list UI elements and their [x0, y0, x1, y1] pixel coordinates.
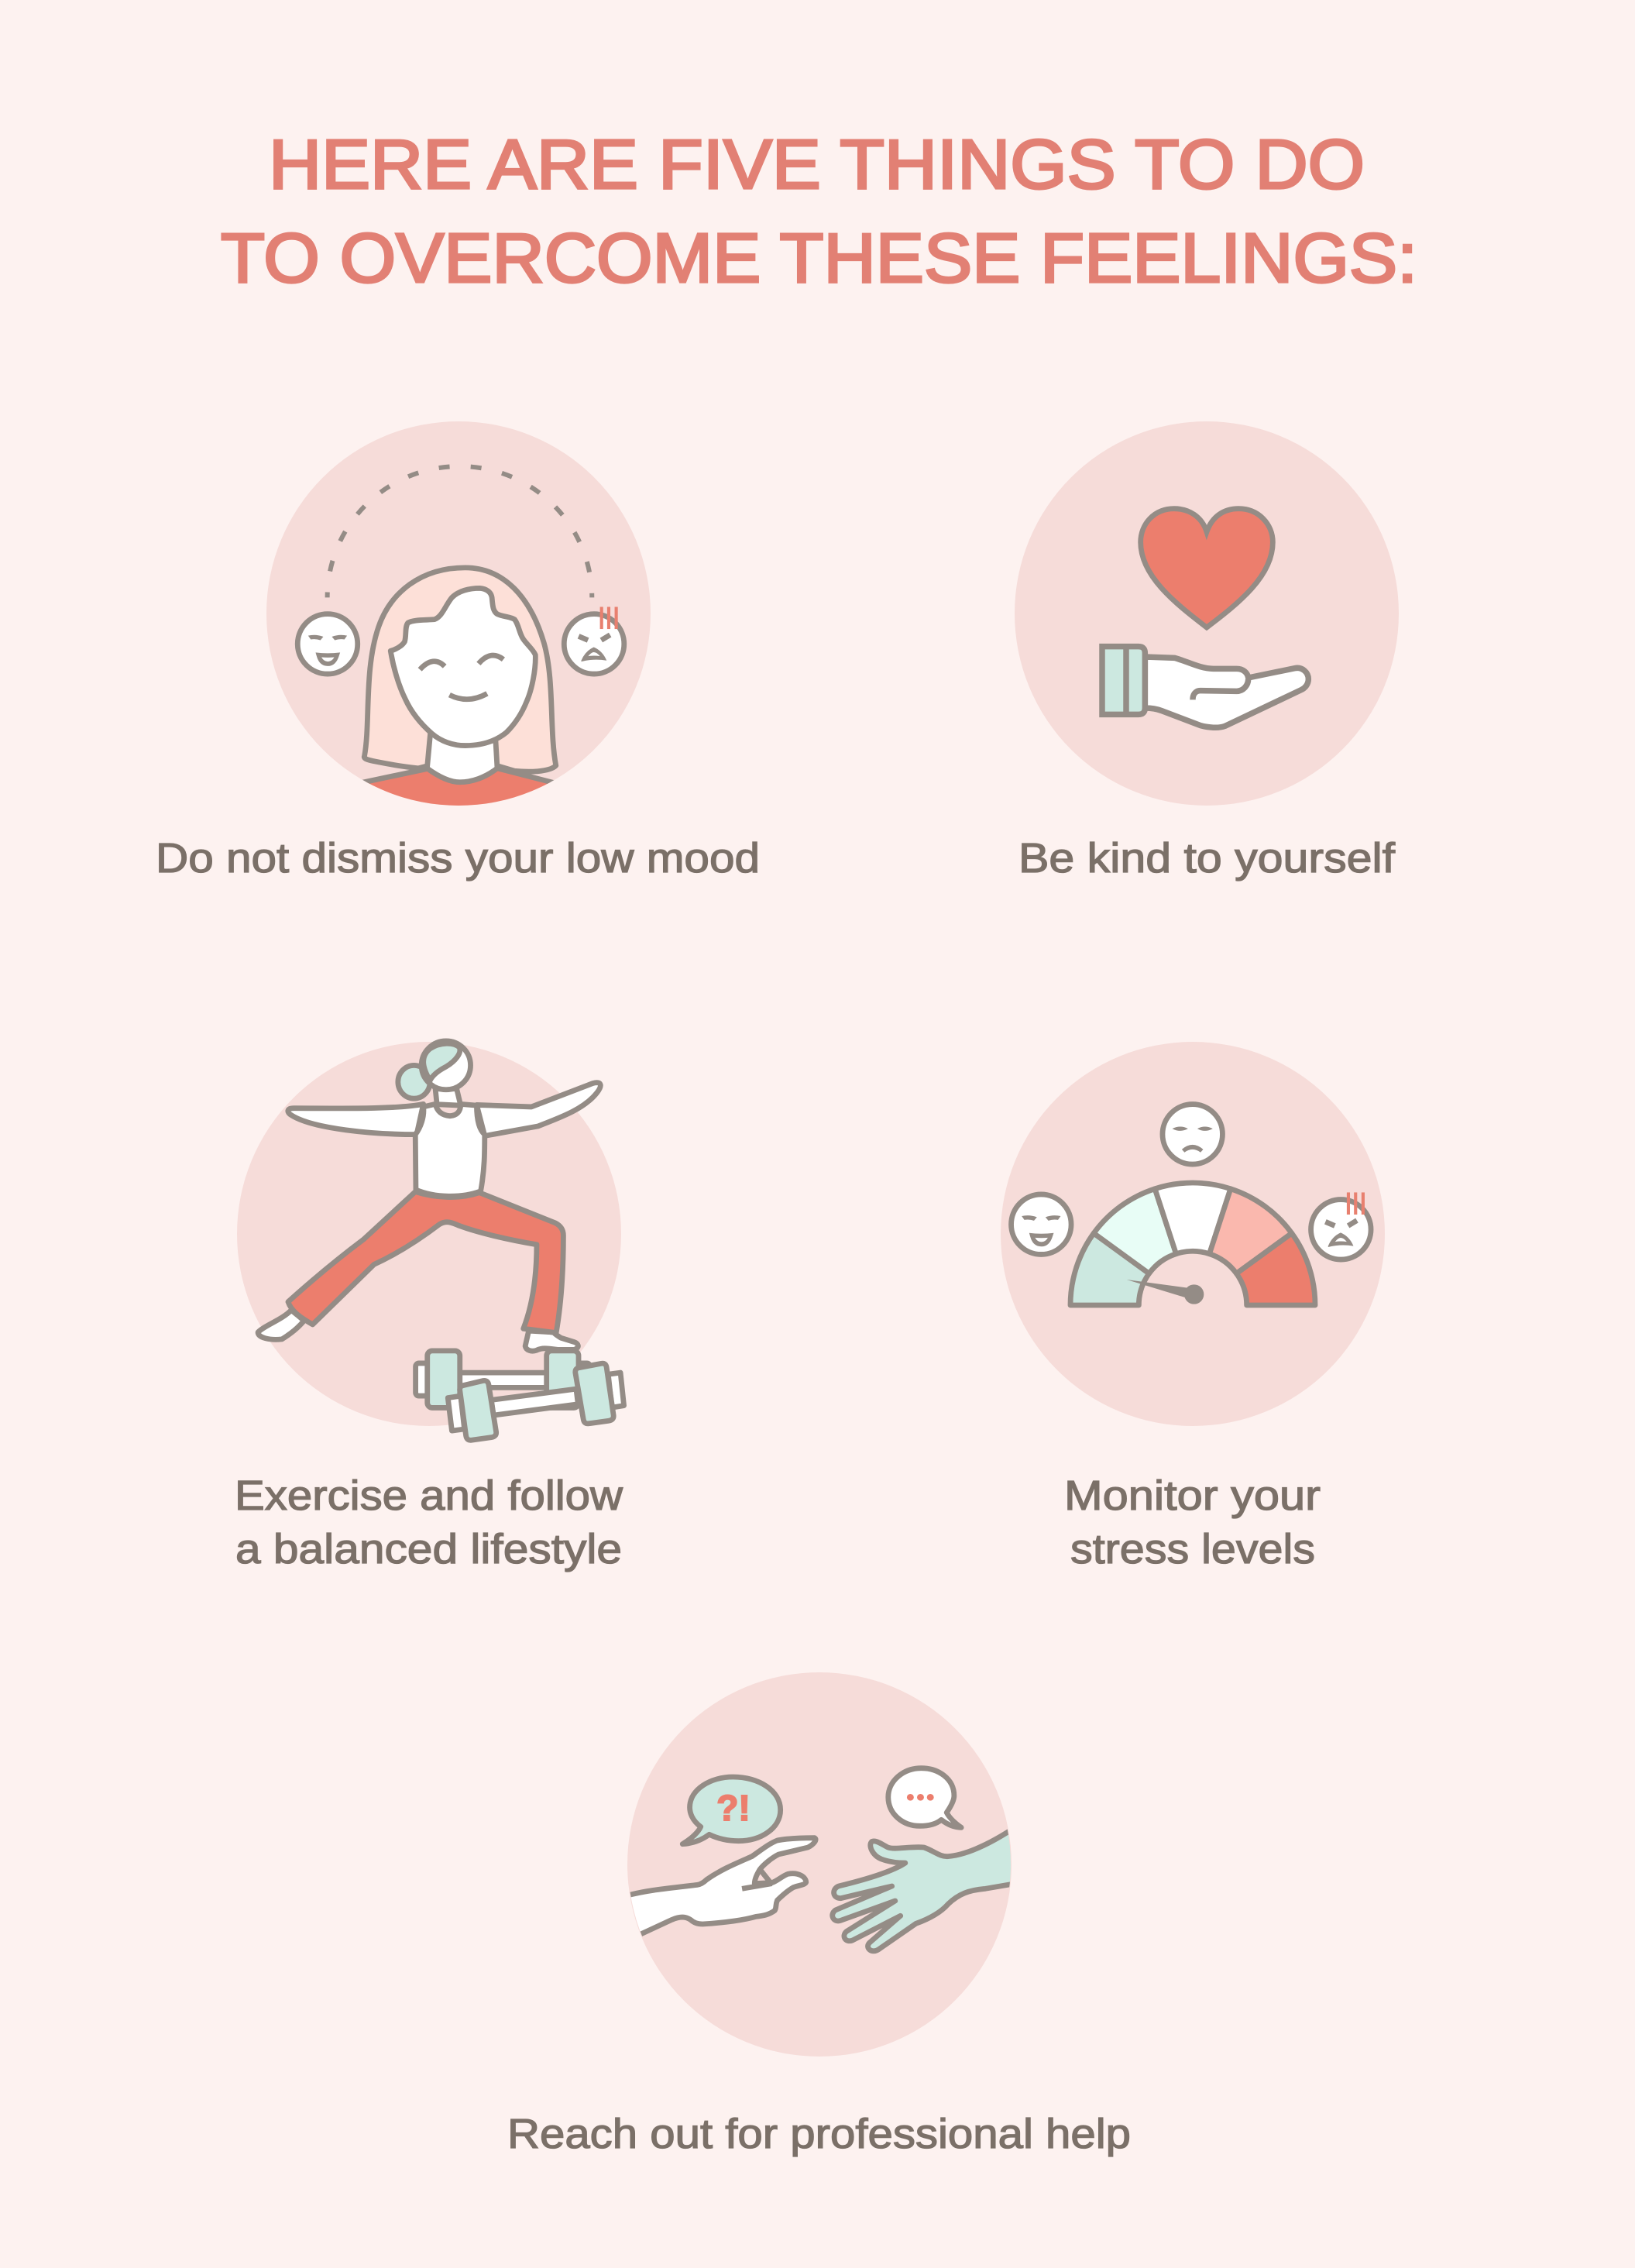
face — [390, 588, 535, 746]
panel: exercise and follow a balanced lifestyle — [235, 1041, 624, 1572]
facial features — [420, 655, 503, 699]
label line 2: stress levels — [1070, 1526, 1315, 1572]
label: Exercise and follow — [235, 1472, 623, 1519]
label line 2: a balanced lifestyle — [235, 1526, 622, 1572]
label: Monitor your — [1064, 1472, 1321, 1519]
title: TO OVERCOME THESE FEELINGS: — [221, 220, 1417, 297]
left hand finger lines — [742, 1869, 772, 1888]
panel: reach out for professional help — [507, 1672, 1131, 2157]
hair — [364, 568, 556, 771]
panel circle 2 — [1015, 421, 1399, 806]
hands clipped to circle — [630, 1830, 1011, 1954]
question speech bubble — [682, 1777, 781, 1844]
title: HERE ARE FIVE THINGS TO DO — [269, 126, 1365, 204]
ellipsis dots — [907, 1794, 934, 1801]
title — [221, 126, 1417, 297]
illustration: woman with swinging moods — [297, 466, 624, 782]
panel circle 3 — [237, 1042, 621, 1426]
left arm — [288, 1104, 424, 1135]
neck — [427, 731, 497, 782]
front dumbbell — [448, 1363, 624, 1440]
hair bun — [398, 1065, 430, 1098]
speech bubbles — [682, 1768, 961, 1844]
panel: do not dismiss your low mood — [156, 421, 760, 881]
open hand — [1145, 657, 1308, 727]
right foot — [525, 1331, 578, 1351]
trousers — [288, 1192, 563, 1333]
tank top — [415, 1104, 485, 1196]
panel circle 4 — [1001, 1042, 1385, 1426]
panel circle 5 — [627, 1672, 1012, 2057]
left white hand — [630, 1835, 818, 1936]
gauge segment middle — [1155, 1183, 1231, 1254]
needle — [1127, 1280, 1204, 1304]
rear dumbbell — [416, 1351, 590, 1407]
panel: be kind to yourself — [1015, 421, 1399, 881]
hair — [424, 1043, 460, 1081]
angry face icon — [1311, 1192, 1371, 1259]
gauge segment calm — [1070, 1233, 1149, 1305]
happy face icon — [1012, 1194, 1071, 1254]
heart — [1141, 509, 1273, 627]
angry face icon — [564, 607, 624, 674]
right arm — [476, 1083, 600, 1136]
right mint hand — [830, 1830, 1011, 1954]
gauge segment low — [1094, 1189, 1176, 1273]
illustration: stress gauge — [1070, 1183, 1315, 1305]
label: Do not dismiss your low mood — [156, 835, 760, 881]
label: Be kind to yourself — [1018, 835, 1396, 881]
left foot — [258, 1310, 304, 1339]
dashed arc — [328, 466, 592, 597]
gauge segment raised — [1210, 1189, 1292, 1273]
smiling face icon — [297, 614, 358, 674]
gauge segment high — [1236, 1233, 1315, 1305]
panel circle 1 — [266, 421, 651, 806]
head — [421, 1041, 471, 1090]
shirt — [362, 769, 555, 806]
neck — [435, 1089, 461, 1105]
illustration: yoga pose with dumbbells — [258, 1041, 624, 1440]
sad face icon — [1163, 1105, 1222, 1164]
finger line — [1193, 679, 1249, 699]
label: Reach out for professional help — [507, 2111, 1131, 2157]
panel: monitor your stress levels — [1001, 1042, 1385, 1572]
question and exclamation marks: ?! — [716, 1788, 751, 1828]
ellipsis speech bubble — [888, 1768, 961, 1827]
illustration: heart over open hand — [1102, 509, 1308, 727]
cuff — [1102, 647, 1145, 714]
